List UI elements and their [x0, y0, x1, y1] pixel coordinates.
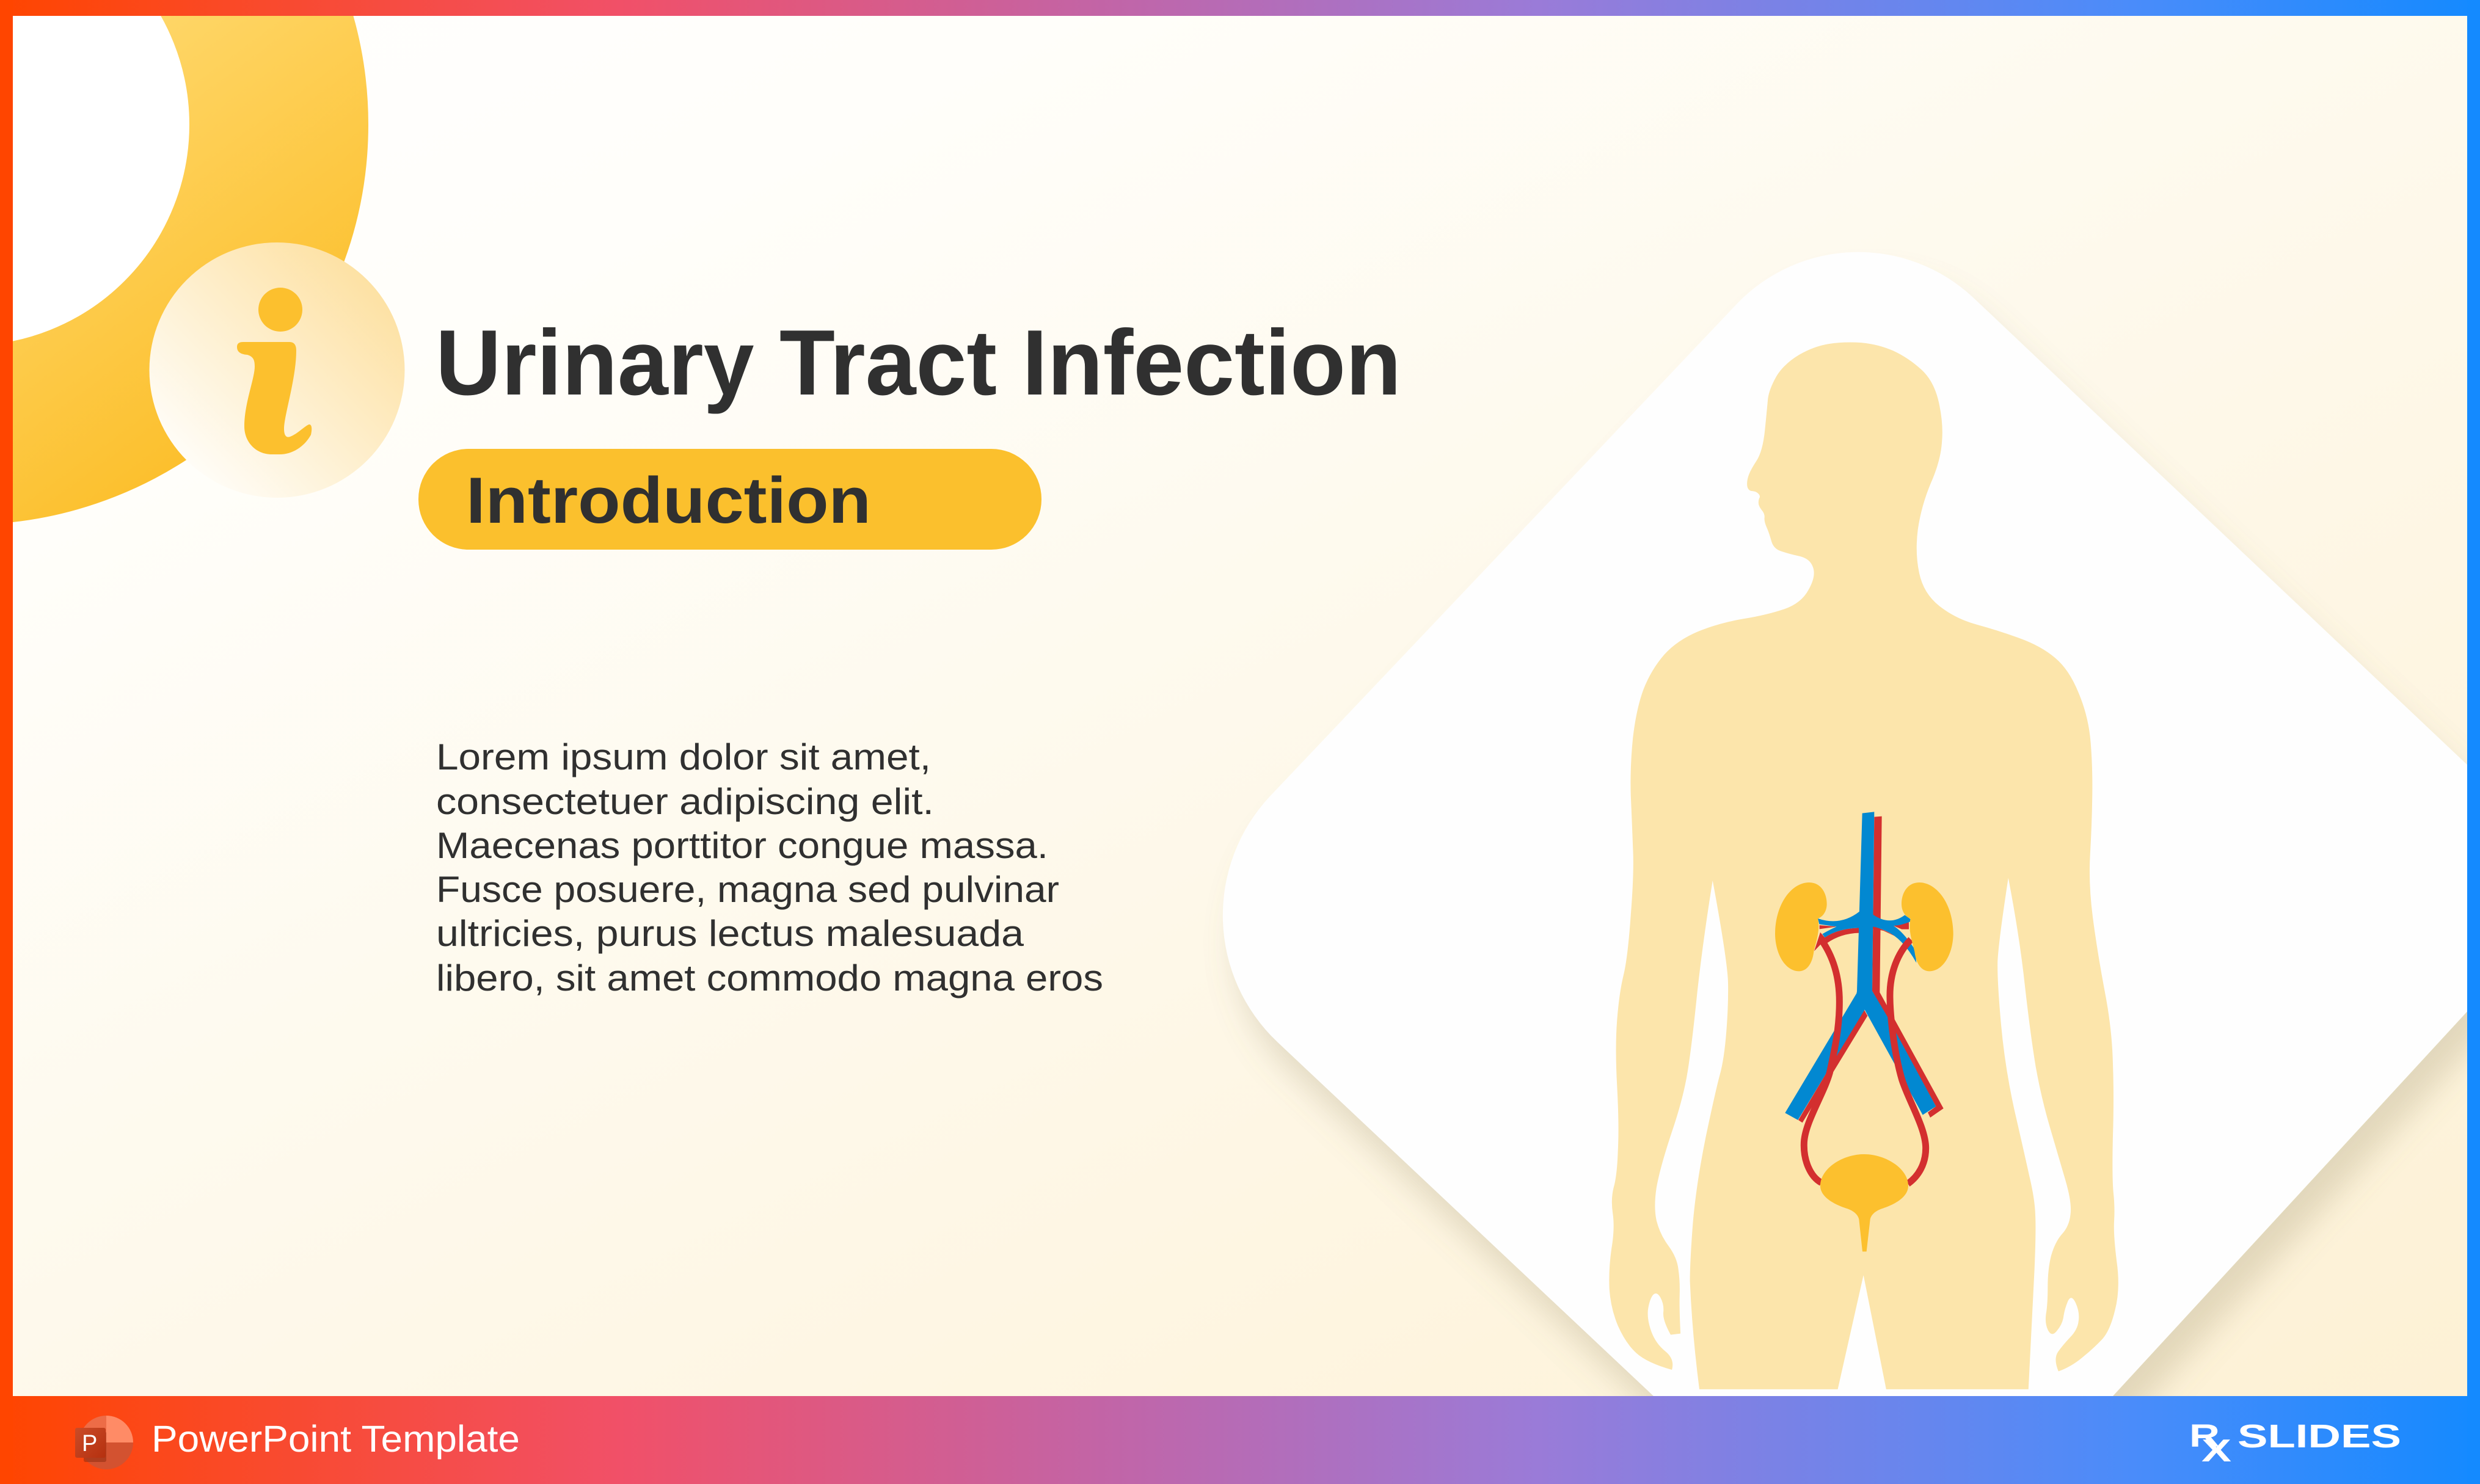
- brand logo: Rx Slides: R: [2189, 1418, 2220, 1454]
- brand logo: Rx Slides: [2189, 1418, 2401, 1469]
- decorative ring top left: [0, 0, 279, 435]
- icon: info badge: [149, 242, 404, 498]
- body text: consectetuer adipiscing elit.: [436, 781, 934, 822]
- brand logo: Rx Slides: SLIDES: [2237, 1418, 2401, 1455]
- title: Urinary Tract Infection: [436, 311, 1401, 415]
- right ureter: [1890, 939, 1926, 1184]
- icon: PowerPoint logo: [75, 1416, 133, 1469]
- section pill: Introduction: Introduction: [466, 464, 871, 537]
- vena cava and renal veins: [1785, 812, 1936, 1120]
- right kidney: [1902, 882, 1953, 971]
- section pill: Introduction: [418, 449, 1041, 550]
- urinary system anatomy: [1775, 812, 1953, 1251]
- body text: Lorem ipsum dolor sit amet,: [436, 737, 931, 777]
- left ureter: [1804, 939, 1839, 1183]
- body text: Fusce posuere, magna sed pulvinar: [436, 869, 1059, 910]
- footer label: PowerPoint Template: [151, 1418, 520, 1460]
- left kidney: [1775, 882, 1827, 971]
- body text: [436, 737, 1103, 998]
- human body silhouette: [1609, 342, 2118, 1389]
- icon: PowerPoint logo: P: [82, 1431, 97, 1457]
- body text: libero, sit amet commodo magna eros: [436, 958, 1103, 998]
- bladder and urethra: [1820, 1154, 1908, 1251]
- panel: rounded diamond backdrop: [1223, 252, 2480, 1435]
- body text: Maecenas porttitor congue massa.: [436, 825, 1048, 866]
- aorta and iliac arteries: [1798, 817, 1944, 1122]
- brand logo: Rx Slides: X: [2201, 1433, 2231, 1469]
- body text: ultricies, purus lectus malesuada: [436, 913, 1024, 954]
